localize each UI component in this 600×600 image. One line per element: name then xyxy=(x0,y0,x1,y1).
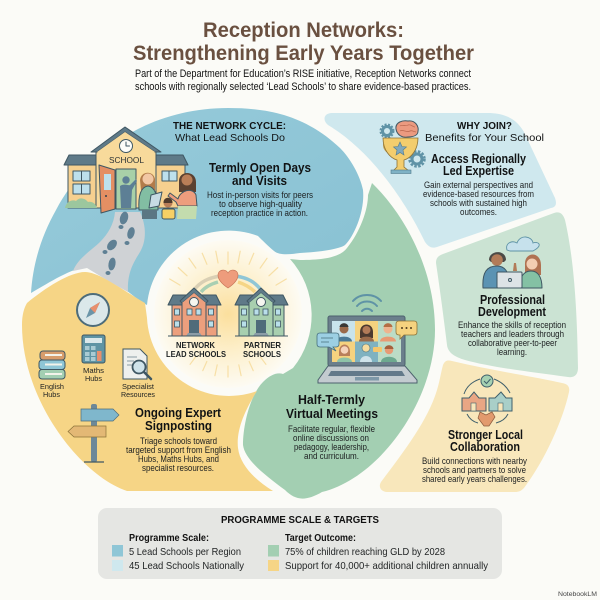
text block: half-termly virtual meetings xyxy=(286,393,378,461)
icon: network lead school xyxy=(168,288,221,336)
text block: professional development: Enhance the skills of reception xyxy=(458,320,566,330)
text block: ongoing expert signposting: targeted support from English xyxy=(126,445,231,455)
sub-element: teacher with clipboard xyxy=(139,173,162,219)
sub-element: parent and child xyxy=(162,173,197,219)
labels: hub icons: Specialist xyxy=(122,382,155,391)
legend: target outcome: 75% of children reaching GLD by 2028 xyxy=(285,547,445,558)
panel: half-termly virtual meetings xyxy=(243,183,435,499)
icon: school building xyxy=(64,127,197,219)
text block: ongoing expert signposting: Triage schools toward xyxy=(140,436,217,446)
icon: calculator xyxy=(82,335,105,363)
icon: heart xyxy=(218,270,238,288)
title: Reception Networks: xyxy=(203,19,404,42)
intro text: Part of the Department for Education’s RISE initiative, Reception Networks connect xyxy=(135,68,471,80)
text block: ongoing expert signposting: Hubs, Maths Hubs, and xyxy=(138,454,219,464)
text block: access regionally led expertise xyxy=(423,152,534,217)
text block: ongoing expert signposting: specialist resources. xyxy=(142,463,214,473)
icon: books xyxy=(39,351,65,379)
text block: termly open days: Host in-person visits for peers xyxy=(207,190,313,200)
text block: access regionally led expertise: outcomes. xyxy=(460,207,497,217)
text block: half-termly virtual meetings: Half-Termly xyxy=(298,393,365,407)
panel: professional development xyxy=(436,212,578,377)
panel: stronger local collaboration xyxy=(380,360,569,492)
labels: hub icons: English xyxy=(40,382,64,391)
labels: school types: PARTNER xyxy=(244,340,281,350)
text block: half-termly virtual meetings: Facilitate regular, flexible xyxy=(288,424,375,434)
text block: professional development: learning. xyxy=(497,347,527,357)
text block: access regionally led expertise: schools with sustained high xyxy=(430,198,527,208)
heading: why join: Benefits for Your School xyxy=(425,132,544,144)
icon: colleagues with laptop xyxy=(483,237,542,288)
legend: target outcome: Support for 40,000+ additional children annually xyxy=(285,561,489,572)
panel: access regionally led expertise xyxy=(325,113,556,248)
central hub: network and partner schools xyxy=(154,240,302,388)
text block: termly open days: reception practice in action. xyxy=(211,208,308,218)
heading: network cycle xyxy=(173,120,286,144)
legend: target outcome xyxy=(268,533,489,572)
labels: hub icons: Resources xyxy=(121,390,155,399)
icon: laptop video call xyxy=(317,295,417,383)
legend: programme scale: 5 Lead Schools per Region xyxy=(129,547,241,558)
text block: stronger local collaboration xyxy=(422,428,527,484)
text block: ongoing expert signposting: Ongoing Expert xyxy=(135,406,222,420)
text block: professional development: Development xyxy=(478,305,547,319)
legend: programme scale: 45 Lead Schools Nationally xyxy=(129,561,245,572)
intro text xyxy=(135,68,471,93)
text block: stronger local collaboration: schools and partners to solve xyxy=(423,465,526,475)
text block: termly open days: Termly Open Days xyxy=(209,161,311,175)
text block: stronger local collaboration: Collaboration xyxy=(450,440,520,454)
icon: school building: SCHOOL xyxy=(109,156,145,165)
labels: school types: SCHOOLS xyxy=(243,349,281,359)
legend: target outcome: Target Outcome: xyxy=(285,533,356,544)
icon: trophy with brain and gears xyxy=(380,121,424,174)
icon: connecting arches xyxy=(194,276,261,292)
legend: programme scale xyxy=(112,533,245,572)
panel: termly open days xyxy=(31,108,363,305)
text block: professional development xyxy=(458,293,566,357)
heading: why join xyxy=(425,120,544,144)
text block: stronger local collaboration: Stronger Local xyxy=(448,428,523,442)
labels: school types: NETWORK xyxy=(176,340,215,350)
heading: why join: WHY JOIN? xyxy=(457,120,512,132)
icon: compass xyxy=(77,294,109,326)
text block: access regionally led expertise: Gain external perspectives and xyxy=(424,180,533,190)
text block: access regionally led expertise: Led Expertise xyxy=(443,164,514,178)
heading: network cycle: What Lead Schools Do xyxy=(175,132,285,144)
panel: programme scale and targets xyxy=(98,508,502,579)
icon: connected schools and handshake xyxy=(462,375,512,426)
watermark: NotebookLM xyxy=(558,592,597,598)
text block: termly open days xyxy=(207,161,313,218)
title: Strengthening Early Years Together xyxy=(133,42,474,65)
text block: stronger local collaboration: Build connections with nearby xyxy=(422,456,527,466)
text block: access regionally led expertise: Access Regionally xyxy=(431,152,526,166)
icon: footpath xyxy=(73,211,145,292)
heading: network cycle: THE NETWORK CYCLE: xyxy=(173,120,286,132)
legend heading: PROGRAMME SCALE & TARGETS xyxy=(221,514,379,526)
labels: hub icons: Hubs xyxy=(43,390,60,399)
text block: ongoing expert signposting: Signposting xyxy=(145,419,212,433)
text block: termly open days: to observe high-quality xyxy=(219,199,302,209)
text block: half-termly virtual meetings: pedagogy, leadership, xyxy=(294,442,369,452)
text block: half-termly virtual meetings: online discussions on xyxy=(293,433,369,443)
legend: programme scale: Programme Scale: xyxy=(129,533,209,544)
text block: professional development: Professional xyxy=(480,293,545,307)
labels: hub icons: Maths xyxy=(83,366,104,375)
text block: half-termly virtual meetings: Virtual Meetings xyxy=(286,407,378,421)
text block: professional development: teachers and leaders through xyxy=(461,329,564,339)
title xyxy=(133,19,474,65)
intro text: schools with regionally selected ‘Lead Schools’ to share evidence-based practices. xyxy=(135,81,471,93)
text block: access regionally led expertise: evidence-based resources from xyxy=(423,189,534,199)
text block: half-termly virtual meetings: and curriculum. xyxy=(304,451,359,461)
panel: ongoing expert signposting xyxy=(22,272,273,491)
labels: school types: LEAD SCHOOLS xyxy=(166,349,226,359)
icon: partner school xyxy=(235,288,288,336)
labels: hub icons: Hubs xyxy=(85,374,102,383)
text block: professional development: collaborative peer-to-peer xyxy=(468,338,557,348)
text block: stronger local collaboration: shared early years challenges. xyxy=(422,474,527,484)
labels: hub icons xyxy=(40,366,155,399)
labels: school types xyxy=(166,340,281,359)
text block: ongoing expert signposting xyxy=(126,406,231,473)
text block: termly open days: and Visits xyxy=(232,174,287,188)
icon: signpost xyxy=(68,404,119,462)
icon: document with magnifier xyxy=(123,349,151,379)
